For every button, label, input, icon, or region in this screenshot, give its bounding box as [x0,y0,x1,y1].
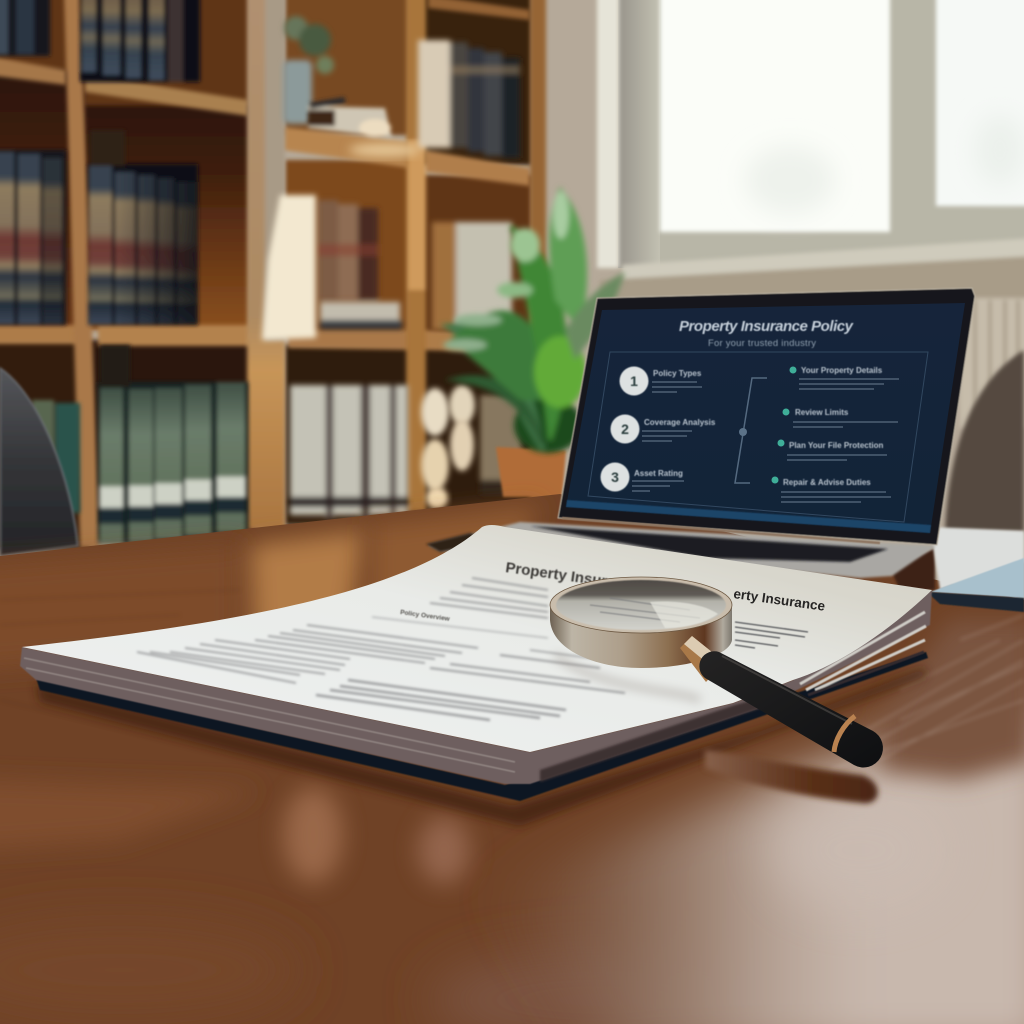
list item 3: Plan Your File Protection [789,441,884,450]
pot [496,447,566,497]
paper and tablet at right edge [927,527,1024,612]
page subheading: Policy Overview [400,609,451,623]
window wall background [0,0,1024,620]
top page [22,525,932,752]
shelf compartments [0,0,535,550]
keyboard [530,526,888,562]
left chair [0,368,78,556]
gold band [834,716,855,752]
step 2: 2 [621,421,629,437]
bookshelf [0,0,546,550]
wooden table [0,494,1024,1024]
books: lower left row [32,345,248,544]
sunlit middle books [318,200,512,330]
table reflections [0,505,1024,1024]
screen title: Property Insurance Policy [679,318,854,335]
laptop lid [558,288,975,545]
shelf uprights [64,0,546,548]
stack page lines [24,612,926,772]
magnifying glass [550,577,883,803]
books: middle left row [0,130,198,325]
glare on table [480,700,1024,1024]
body text lines [137,578,625,720]
dark stack band near handle [540,690,800,782]
list item 1: Your Property Details [801,366,883,375]
handle [699,651,883,767]
step 3 [600,462,684,492]
magnifier cylinder [550,605,732,668]
step 2: Coverage Analysis [644,418,716,427]
numbered steps on screen [600,366,716,492]
laptop base [428,522,936,578]
laptop screen [566,303,965,533]
upper right books [418,40,520,158]
magnifier shadow on page [555,655,700,700]
shelf boards [0,0,530,352]
folder shadow [36,668,926,826]
step 1: Policy Types [653,369,702,378]
small plant on shelf [283,16,334,124]
list item 2: Review Limits [795,408,849,417]
window panes [597,0,1024,268]
dark wood grain [0,590,300,770]
step 1 [620,366,702,396]
screen content panel border [588,352,928,522]
sunlight blobs on shelf [262,143,475,509]
books: right unit [290,40,522,520]
laptop [426,288,975,578]
page heading left: Property Insurance [504,559,642,595]
folder cover [36,652,928,801]
leaves [440,187,625,453]
page heading right: erty Insurance [733,586,827,614]
hinge strip [562,518,880,543]
right list on screen [772,366,899,502]
screen subtitle: For your trusted industry [708,338,816,349]
step 3: Asset Rating [634,469,683,478]
small text right of magnifier [735,622,808,648]
connector node [739,428,747,436]
lower books [290,385,522,520]
magnifier rim [550,577,732,633]
step 2 [610,414,716,444]
books: top left row [0,0,200,82]
potted plant [440,187,625,497]
document folder [20,525,932,826]
step 1: 1 [630,373,638,389]
lens [556,580,726,630]
step 3: 3 [611,469,619,485]
list item 4: Repair & Advise Duties [783,478,871,487]
right chair [945,350,1024,532]
handle shadow on table [705,750,878,803]
wood grain streaks [830,615,1024,770]
stacked books on top shelf [308,100,392,138]
ferrule [680,636,724,682]
window sill and radiator [600,238,1024,428]
bracket connector [735,378,767,483]
page stack [20,590,932,784]
